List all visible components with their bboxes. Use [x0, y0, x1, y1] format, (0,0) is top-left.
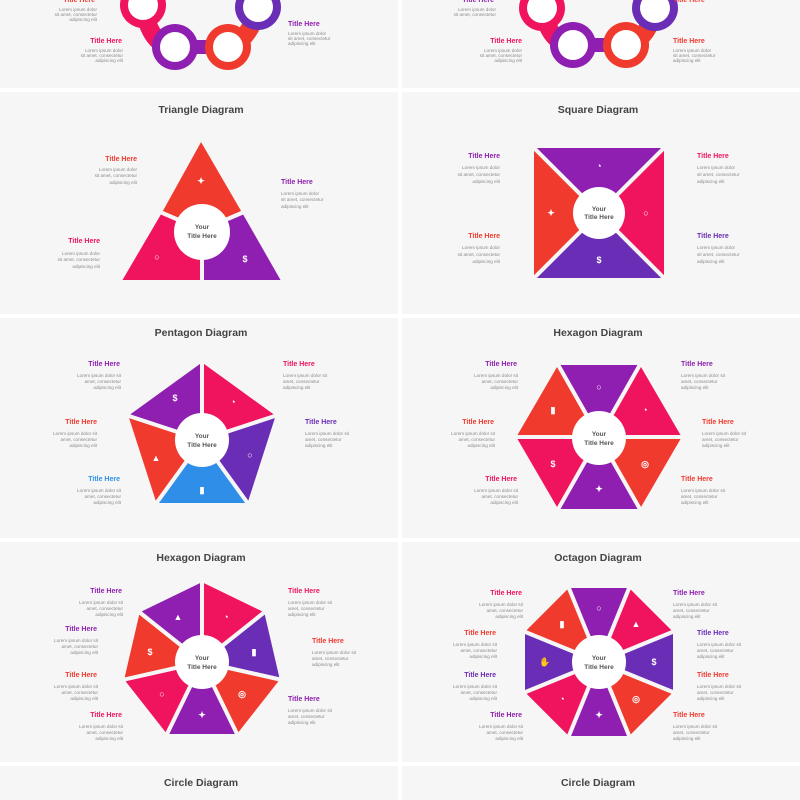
panel: top-right chain diagram: Title Here	[490, 38, 522, 45]
panel: octagon diagram: ✋	[539, 656, 551, 667]
heading: circle diagram left: Circle Diagram	[164, 777, 238, 789]
panel: heptagon (hexagon titled) diagram: Lorem ipsum dolor sit	[288, 708, 333, 713]
panel: hexagon diagram: amet, consectetur	[481, 494, 518, 499]
panel: triangle diagram: ○	[154, 252, 160, 262]
panel: square diagram: Title Here	[697, 153, 729, 160]
panel: heptagon (hexagon titled) diagram: ◔	[223, 612, 229, 622]
panel: square diagram: sit amet, consectetur	[458, 172, 500, 177]
panel: hexagon diagram: adipiscing elit	[681, 385, 709, 390]
panel: octagon diagram: adipiscing elit	[673, 614, 701, 619]
panel: heptagon (hexagon titled) diagram: Title Here	[90, 588, 122, 595]
panel: triangle diagram: adipiscing elit	[109, 180, 138, 185]
panel: heptagon (hexagon titled) diagram: adipiscing elit	[312, 662, 340, 667]
panel: octagon diagram: Lorem ipsum dolor sit	[673, 724, 718, 729]
panel: octagon diagram: Title Here	[697, 630, 729, 637]
panel: octagon diagram: $	[651, 657, 657, 667]
panel: pentagon diagram: amet, consectetur	[283, 379, 320, 384]
panel: square diagram: adipiscing elit	[697, 259, 725, 264]
panel: square diagram: ✦	[547, 208, 555, 218]
panel: square diagram	[458, 104, 740, 280]
panel: octagon diagram: adipiscing elit	[673, 736, 701, 741]
panel: heptagon (hexagon titled) diagram: Lorem ipsum dolor sit	[79, 724, 124, 729]
panel: triangle diagram: Your	[195, 224, 210, 231]
panel: octagon diagram: Title Here	[673, 712, 705, 719]
panel: octagon diagram: adipiscing elit	[469, 654, 498, 659]
panel: octagon diagram: Lorem ipsum dolor sit	[697, 684, 742, 689]
panel: pentagon diagram: amet, consectetur	[84, 494, 121, 499]
panel: octagon diagram: Title Here	[464, 672, 496, 679]
panel: octagon diagram	[453, 552, 742, 741]
panel: pentagon diagram: Title Here	[88, 361, 120, 368]
panel: top-left chain diagram: adipiscing elit	[288, 41, 316, 46]
panel: square diagram: Title Here	[584, 214, 614, 221]
panel: hexagon diagram: amet, consectetur	[458, 437, 495, 442]
panel: top-left chain diagram: sit amet, consectetur	[288, 36, 331, 41]
panel: heptagon (hexagon titled) diagram: ○	[159, 689, 165, 699]
panel: hexagon diagram: ◔	[642, 405, 648, 415]
panel: hexagon diagram: Title Here	[485, 361, 517, 368]
panel: heptagon (hexagon titled) diagram: ▲	[174, 612, 182, 622]
panel: pentagon diagram: Title Here	[305, 419, 337, 426]
panel: hexagon diagram: Lorem ipsum dolor sit	[474, 373, 519, 378]
panel: triangle diagram: Lorem ipsum dolor	[62, 251, 100, 256]
panel: pentagon diagram: Title Here	[187, 442, 217, 449]
panel: octagon diagram: Octagon Diagram	[554, 552, 642, 564]
panel: octagon diagram: ◎	[632, 694, 640, 704]
panel: hexagon diagram: ○	[596, 382, 602, 392]
panel: octagon diagram: ◔	[559, 694, 565, 704]
panel: hexagon diagram: Title Here	[681, 476, 713, 483]
panel: square diagram: sit amet, consectetur	[458, 252, 500, 257]
panel: octagon diagram: amet, consectetur	[673, 730, 710, 735]
panel: heptagon (hexagon titled) diagram: Lorem ipsum dolor sit	[288, 600, 333, 605]
panel: square diagram: ○	[643, 208, 649, 218]
panel: triangle diagram: Title Here	[68, 238, 100, 245]
panel: heptagon (hexagon titled) diagram: Title Here	[65, 672, 97, 679]
panel: octagon diagram: ▲	[632, 619, 640, 629]
panel: square diagram: Your	[592, 206, 607, 213]
panel: heptagon (hexagon titled) diagram: ▮	[252, 647, 257, 657]
panel: heptagon (hexagon titled) diagram: adipiscing elit	[95, 612, 124, 617]
panel: hexagon diagram: amet, consectetur	[481, 379, 518, 384]
heading: circle diagram right: Circle Diagram	[561, 777, 635, 789]
panel: triangle diagram: sit amet, consectetur	[95, 173, 137, 178]
panel: triangle diagram: Lorem ipsum dolor	[99, 167, 137, 172]
panel: pentagon diagram: ▮	[200, 485, 205, 495]
panel: top-left chain diagram	[55, 0, 331, 70]
panel: pentagon diagram: Title Here	[283, 361, 315, 368]
panel: hexagon diagram: Lorem ipsum dolor sit	[681, 373, 726, 378]
panel: octagon diagram: Lorem ipsum dolor sit	[479, 602, 524, 607]
panel: top-right chain diagram	[454, 0, 716, 68]
panel: hexagon diagram: Your	[592, 431, 607, 438]
panel: heptagon (hexagon titled) diagram: Lorem ipsum dolor sit	[54, 638, 99, 643]
panel: top-right chain diagram: sit amet, consectetur	[454, 12, 496, 17]
panel: pentagon diagram: ◔	[230, 397, 236, 407]
panel: octagon diagram: ✦	[595, 710, 603, 720]
panel: heptagon (hexagon titled) diagram: ◎	[238, 689, 246, 699]
panel: heptagon (hexagon titled) diagram: Your	[195, 655, 210, 662]
panel: hexagon diagram: adipiscing elit	[490, 500, 519, 505]
panel: octagon diagram: adipiscing elit	[495, 614, 524, 619]
panel: heptagon (hexagon titled) diagram: amet, consectetur	[86, 730, 123, 735]
panel: triangle diagram: Triangle Diagram	[158, 104, 244, 116]
panel: heptagon (hexagon titled) diagram: adipiscing elit	[70, 696, 99, 701]
panel: square diagram: sit amet, consectetur	[697, 252, 740, 257]
panel: square diagram: Lorem ipsum dolor	[462, 245, 500, 250]
panel: square diagram: Square Diagram	[558, 104, 638, 116]
panel: octagon diagram: Lorem ipsum dolor sit	[479, 724, 524, 729]
panel: square diagram: adipiscing elit	[472, 179, 501, 184]
panel: heptagon (hexagon titled) diagram: amet, consectetur	[288, 714, 325, 719]
panel: octagon diagram: Title Here	[464, 630, 496, 637]
panel: hexagon diagram: Lorem ipsum dolor sit	[681, 488, 726, 493]
panel: hexagon diagram: ✦	[595, 484, 603, 494]
panel: hexagon diagram: amet, consectetur	[702, 437, 739, 442]
panel: heptagon (hexagon titled) diagram: adipiscing elit	[288, 612, 316, 617]
panel: square diagram: $	[596, 255, 602, 265]
panel: heptagon (hexagon titled) diagram: Title Here	[288, 588, 320, 595]
panel: pentagon diagram: Title Here	[65, 419, 97, 426]
panel: pentagon diagram: amet, consectetur	[60, 437, 97, 442]
panel: octagon diagram: adipiscing elit	[469, 696, 498, 701]
panel: heptagon (hexagon titled) diagram: amet, consectetur	[86, 606, 123, 611]
panel: triangle diagram: adipiscing elit	[281, 204, 309, 209]
panel: square diagram: ◔	[596, 161, 602, 171]
panel: heptagon (hexagon titled) diagram: Lorem ipsum dolor sit	[79, 600, 124, 605]
panel: pentagon diagram: adipiscing elit	[93, 385, 122, 390]
panel: heptagon (hexagon titled) diagram: amet, consectetur	[288, 606, 325, 611]
panel: triangle diagram: ✦	[197, 176, 205, 186]
panel: top-right chain diagram: sit amet, consectetur	[673, 53, 716, 58]
panel: hexagon diagram: Title Here	[485, 476, 517, 483]
panel: octagon diagram: amet, consectetur	[697, 648, 734, 653]
panel: hexagon diagram: adipiscing elit	[490, 385, 519, 390]
panel: octagon diagram: Title Here	[490, 712, 522, 719]
panel: octagon diagram: Title Here	[584, 664, 614, 671]
panel: heptagon (hexagon titled) diagram: adipiscing elit	[95, 736, 124, 741]
panel: heptagon (hexagon titled) diagram: Title Here	[65, 626, 97, 633]
panel: octagon diagram: adipiscing elit	[697, 654, 725, 659]
panel: heptagon (hexagon titled) diagram: Title Here	[90, 712, 122, 719]
panel: heptagon (hexagon titled) diagram: adipiscing elit	[70, 650, 99, 655]
panel: triangle diagram: $	[242, 254, 248, 264]
panel: top-left chain diagram: Lorem ipsum dolor	[59, 7, 97, 12]
panel: pentagon diagram	[53, 327, 350, 505]
panel: heptagon (hexagon titled) diagram: amet, consectetur	[61, 644, 98, 649]
panel: octagon diagram: Lorem ipsum dolor sit	[453, 642, 498, 647]
panel: triangle diagram: sit amet, consectetur	[58, 257, 100, 262]
panel: octagon diagram: amet, consectetur	[486, 608, 523, 613]
panel: top-left chain diagram: Lorem ipsum dolor	[85, 48, 123, 53]
panel: top-right chain diagram: Lorem ipsum dolor	[458, 7, 496, 12]
panel: hexagon diagram: ▮	[551, 405, 556, 415]
panel: pentagon diagram: $	[172, 393, 178, 403]
panel: octagon diagram: amet, consectetur	[673, 608, 710, 613]
panel: pentagon diagram: Title Here	[88, 476, 120, 483]
panel: hexagon diagram	[451, 327, 747, 511]
panel: top-left chain diagram: adipiscing elit	[95, 58, 124, 63]
panel: hexagon diagram: adipiscing elit	[702, 443, 730, 448]
panel: square diagram: sit amet, consectetur	[697, 172, 740, 177]
panel: square diagram: adipiscing elit	[697, 179, 725, 184]
panel: pentagon diagram: adipiscing elit	[93, 500, 122, 505]
panel: hexagon diagram: Title Here	[584, 440, 614, 447]
panel: octagon diagram: Your	[592, 655, 607, 662]
panel: pentagon diagram: Lorem ipsum dolor sit	[77, 488, 122, 493]
panel: triangle diagram: Lorem ipsum dolor	[281, 191, 320, 196]
panel: heptagon (hexagon titled) diagram: Lorem ipsum dolor sit	[54, 684, 99, 689]
panel: hexagon diagram: Title Here	[681, 361, 713, 368]
panel: octagon diagram: amet, consectetur	[460, 648, 497, 653]
panel: pentagon diagram: adipiscing elit	[305, 443, 333, 448]
panel: hexagon diagram: Title Here	[462, 419, 494, 426]
panel: square diagram: Title Here	[468, 153, 500, 160]
panel: octagon diagram: ○	[596, 603, 602, 613]
panel: hexagon diagram: Hexagon Diagram	[553, 327, 643, 339]
panel: heptagon (hexagon titled) diagram: amet, consectetur	[61, 690, 98, 695]
panel: heptagon (hexagon titled) diagram: Hexagon Diagram	[156, 552, 246, 564]
panel: octagon diagram: amet, consectetur	[486, 730, 523, 735]
panel: square diagram: Lorem ipsum dolor	[697, 245, 736, 250]
panel: hexagon diagram: Lorem ipsum dolor sit	[702, 431, 747, 436]
panel: hexagon diagram: adipiscing elit	[681, 500, 709, 505]
panel: heptagon (hexagon titled) diagram: Title Here	[187, 664, 217, 671]
panel: heptagon (hexagon titled) diagram	[54, 552, 357, 741]
panel: pentagon diagram: Pentagon Diagram	[155, 327, 247, 339]
panel: triangle diagram: Title Here	[281, 179, 313, 186]
panel: hexagon diagram: Lorem ipsum dolor sit	[474, 488, 519, 493]
panel: top-left chain diagram: adipiscing elit	[69, 17, 98, 22]
panel: triangle diagram	[58, 104, 324, 282]
panel: octagon diagram: Lorem ipsum dolor sit	[697, 642, 742, 647]
panel: octagon diagram: Title Here	[490, 590, 522, 597]
panel: octagon diagram: Lorem ipsum dolor sit	[453, 684, 498, 689]
panel: top-right chain diagram: sit amet, consectetur	[480, 53, 522, 58]
panel: heptagon (hexagon titled) diagram: Title Here	[312, 638, 344, 645]
panel: top-right chain diagram: adipiscing elit	[673, 58, 701, 63]
panel: hexagon diagram: ◎	[641, 459, 649, 469]
panel: pentagon diagram: Lorem ipsum dolor sit	[283, 373, 328, 378]
panel: pentagon diagram: Your	[195, 433, 210, 440]
panel: heptagon (hexagon titled) diagram: Lorem ipsum dolor sit	[312, 650, 357, 655]
panel: top-right chain diagram: Lorem ipsum dolor	[673, 48, 712, 53]
panel: hexagon diagram: Lorem ipsum dolor sit	[451, 431, 496, 436]
panel: hexagon diagram: Title Here	[702, 419, 734, 426]
panel: hexagon diagram: adipiscing elit	[467, 443, 496, 448]
panel: top-left chain diagram: Lorem ipsum dolor	[288, 31, 327, 36]
panel: square diagram: adipiscing elit	[472, 259, 501, 264]
panel: hexagon diagram: amet, consectetur	[681, 494, 718, 499]
panel: pentagon diagram: ▲	[152, 453, 160, 463]
panel: pentagon diagram: Lorem ipsum dolor sit	[77, 373, 122, 378]
panel: octagon diagram: adipiscing elit	[495, 736, 524, 741]
panel: hexagon diagram: $	[550, 459, 556, 469]
panel: hexagon diagram: amet, consectetur	[681, 379, 718, 384]
panel: octagon diagram: Lorem ipsum dolor sit	[673, 602, 718, 607]
panel: top-right chain diagram: adipiscing elit	[494, 58, 523, 63]
panel: pentagon diagram: amet, consectetur	[84, 379, 121, 384]
panel: top-right chain diagram: Title Here	[673, 38, 705, 45]
panel: square diagram: Title Here	[697, 233, 729, 240]
panel: triangle diagram: adipiscing elit	[72, 264, 101, 269]
panel: pentagon diagram: ○	[247, 450, 253, 460]
panel: octagon diagram: Title Here	[673, 590, 705, 597]
panel: heptagon (hexagon titled) diagram: ✦	[198, 710, 206, 720]
panel: top-left chain diagram: Title Here	[288, 21, 320, 28]
panel: octagon diagram: Title Here	[697, 672, 729, 679]
panel: heptagon (hexagon titled) diagram: amet, consectetur	[312, 656, 349, 661]
panel: pentagon diagram: amet, consectetur	[305, 437, 342, 442]
panel: top-left chain diagram: Title Here	[90, 38, 122, 45]
panel: triangle diagram: Title Here	[105, 156, 137, 163]
panel: pentagon diagram: Lorem ipsum dolor sit	[305, 431, 350, 436]
panel: pentagon diagram: adipiscing elit	[283, 385, 311, 390]
panel: heptagon (hexagon titled) diagram: $	[147, 647, 153, 657]
panel: pentagon diagram: Lorem ipsum dolor sit	[53, 431, 98, 436]
panel: octagon diagram: amet, consectetur	[460, 690, 497, 695]
panel: top-right chain diagram: Lorem ipsum dolor	[484, 48, 522, 53]
panel: octagon diagram: amet, consectetur	[697, 690, 734, 695]
panel: triangle diagram: Title Here	[187, 233, 217, 240]
panel: octagon diagram: adipiscing elit	[697, 696, 725, 701]
panel: octagon diagram: ▮	[560, 619, 565, 629]
panel: pentagon diagram: adipiscing elit	[69, 443, 98, 448]
panel: triangle diagram: sit amet, consectetur	[281, 197, 324, 202]
panel: square diagram: Lorem ipsum dolor	[697, 165, 736, 170]
panel: top-left chain diagram: sit amet, consectetur	[55, 12, 97, 17]
panel: heptagon (hexagon titled) diagram: Title Here	[288, 696, 320, 703]
panel: heptagon (hexagon titled) diagram: adipiscing elit	[288, 720, 316, 725]
panel: square diagram: Title Here	[468, 233, 500, 240]
panel: square diagram: Lorem ipsum dolor	[462, 165, 500, 170]
panel: top-left chain diagram: sit amet, consectetur	[81, 53, 123, 58]
